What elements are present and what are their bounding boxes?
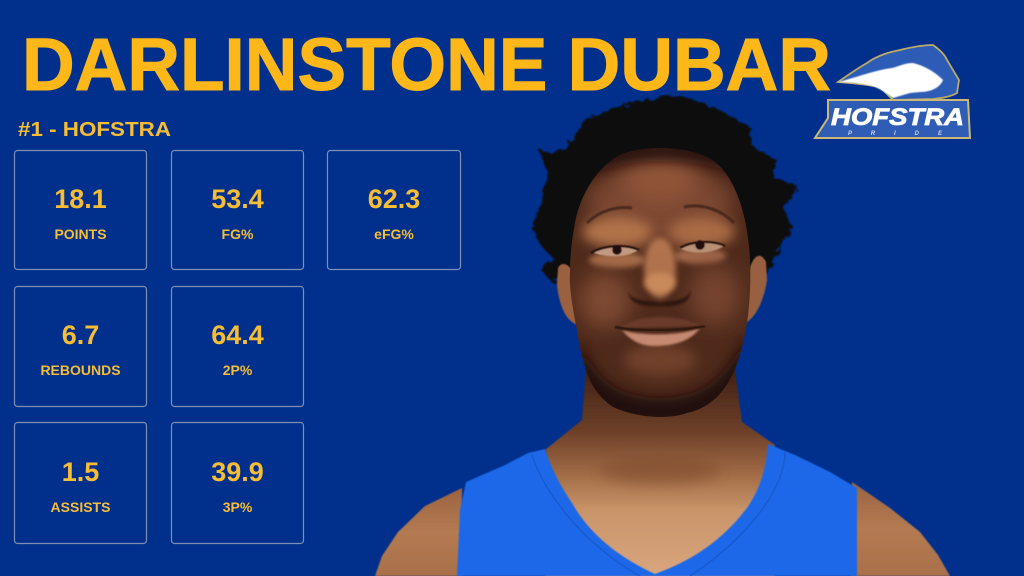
stat card: FG%: FG% xyxy=(222,226,254,242)
neck shadow xyxy=(600,456,720,484)
stat card: 3P% xyxy=(172,422,304,544)
player photo illustration xyxy=(375,95,950,576)
stat card: 2P% xyxy=(172,286,304,406)
title: DARLINSTONE DUBAR xyxy=(22,23,831,106)
stat card: FG% xyxy=(172,150,304,270)
stat card: points: 18.1 xyxy=(54,184,107,214)
logo: white bison face xyxy=(838,63,943,98)
subtitle: rank and team: #1 - HOFSTRA xyxy=(18,119,171,141)
stat card: points xyxy=(14,150,146,270)
stat card: rebounds: REBOUNDS xyxy=(40,362,121,378)
logo: bison head xyxy=(838,45,959,100)
stat card: rebounds: 6.7 xyxy=(62,320,99,350)
stat card: assists xyxy=(14,422,146,544)
hair xyxy=(532,95,797,283)
eyebrows xyxy=(587,206,734,223)
nose xyxy=(628,238,690,306)
stat card: points: POINTS xyxy=(54,226,107,242)
jersey xyxy=(457,444,857,576)
stat card: 2P%: 2P% xyxy=(223,362,253,378)
stat card: rebounds xyxy=(14,286,146,406)
stat card: 3P%: 39.9 xyxy=(211,457,264,487)
logo: wordmark: HOFSTRA xyxy=(831,104,964,131)
stat card: 2P%: 64.4 xyxy=(211,320,264,350)
stat card: assists: ASSISTS xyxy=(51,499,110,515)
right shoulder xyxy=(850,482,950,576)
stat card: eFG% xyxy=(328,150,460,270)
jersey collar shading xyxy=(532,452,785,576)
stat card: assists: 1.5 xyxy=(62,457,99,487)
stat card: eFG%: eFG% xyxy=(374,226,414,242)
Hofstra Pride logo: P R I D E xyxy=(848,131,943,137)
stat card: 3P%: 3P% xyxy=(223,499,253,515)
stat card: eFG%: 62.3 xyxy=(368,184,420,214)
eyes xyxy=(591,240,725,256)
mouth xyxy=(615,317,705,346)
stat card: FG%: 53.4 xyxy=(211,184,264,214)
ears xyxy=(557,264,578,325)
logo: banner xyxy=(815,100,970,138)
Hofstra Pride logo xyxy=(815,45,970,138)
neck and chest xyxy=(545,370,775,576)
left shoulder xyxy=(375,488,462,576)
face xyxy=(570,148,750,417)
